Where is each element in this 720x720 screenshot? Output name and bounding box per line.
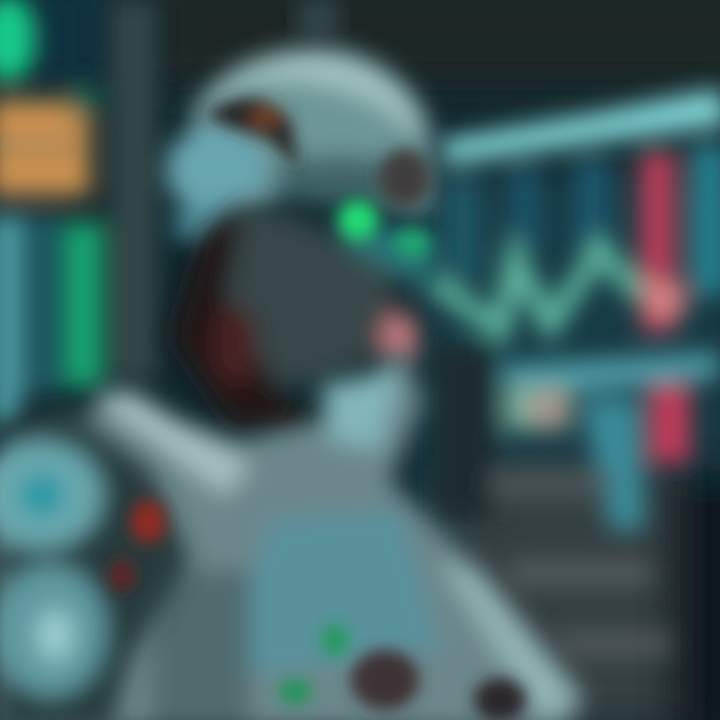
dark pillar — [112, 0, 156, 380]
robot visor and eye socket — [205, 98, 431, 208]
right chart panel — [430, 88, 720, 656]
left chart panel — [0, 0, 156, 425]
icon: green robot eye — [338, 200, 430, 257]
robot head antenna — [298, 0, 338, 36]
robot face — [170, 200, 440, 430]
chest lights — [279, 624, 526, 720]
red shoulder lights — [110, 500, 166, 591]
red bars — [640, 152, 690, 463]
orange price block — [0, 100, 90, 196]
chart trend line — [440, 88, 720, 165]
robot shoulder joint — [0, 405, 190, 720]
zigzag line — [430, 250, 640, 330]
lower right stripes — [490, 472, 670, 656]
icon: green blob — [0, 0, 36, 82]
candle bars — [445, 145, 720, 295]
dark stand — [435, 345, 495, 520]
robot helmet — [165, 48, 432, 243]
green bar — [66, 222, 102, 387]
robot torso — [0, 350, 585, 720]
lower band — [500, 352, 720, 400]
teal left column — [0, 215, 20, 425]
lower chart cluster — [505, 385, 645, 530]
